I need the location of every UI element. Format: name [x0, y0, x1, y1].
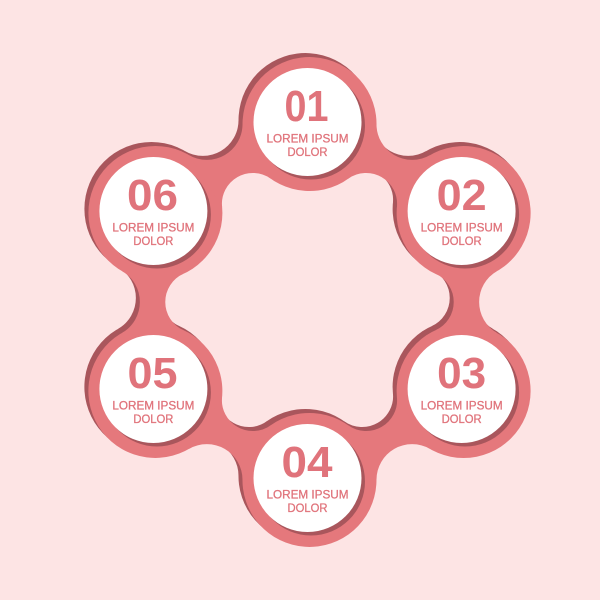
label 05: [112, 398, 194, 426]
label 04: [266, 488, 348, 515]
number 03: 03: [437, 349, 486, 398]
number 04: 04: [282, 438, 333, 487]
number 06: 06: [127, 171, 178, 220]
step 04: [254, 424, 365, 536]
label 03: [421, 398, 503, 426]
label 05: LOREM IPSUM: [112, 398, 194, 412]
number 02: 02: [437, 171, 487, 220]
label 02: [421, 220, 503, 248]
label 04: DOLOR: [288, 501, 328, 515]
ring shadow: [60, 29, 551, 567]
step 05: [99, 335, 211, 446]
label 03: LOREM IPSUM: [421, 398, 503, 412]
label 06: LOREM IPSUM: [112, 220, 194, 234]
label 04: LOREM IPSUM: [266, 488, 348, 502]
step 02: [408, 157, 519, 268]
connected ring: [64, 33, 555, 571]
number 01: 01: [284, 82, 328, 131]
label 01: [266, 132, 348, 159]
step 06: [99, 157, 211, 268]
label 06: [112, 220, 194, 248]
step 01: [254, 68, 365, 180]
label 01: DOLOR: [288, 145, 328, 159]
step 03: [408, 335, 519, 446]
number 05: 05: [128, 349, 178, 398]
label 03: DOLOR: [442, 412, 482, 426]
label 06: DOLOR: [133, 234, 174, 248]
label 02: DOLOR: [442, 234, 482, 248]
label 02: LOREM IPSUM: [421, 220, 503, 234]
label 05: DOLOR: [133, 412, 174, 426]
label 01: LOREM IPSUM: [266, 132, 348, 146]
